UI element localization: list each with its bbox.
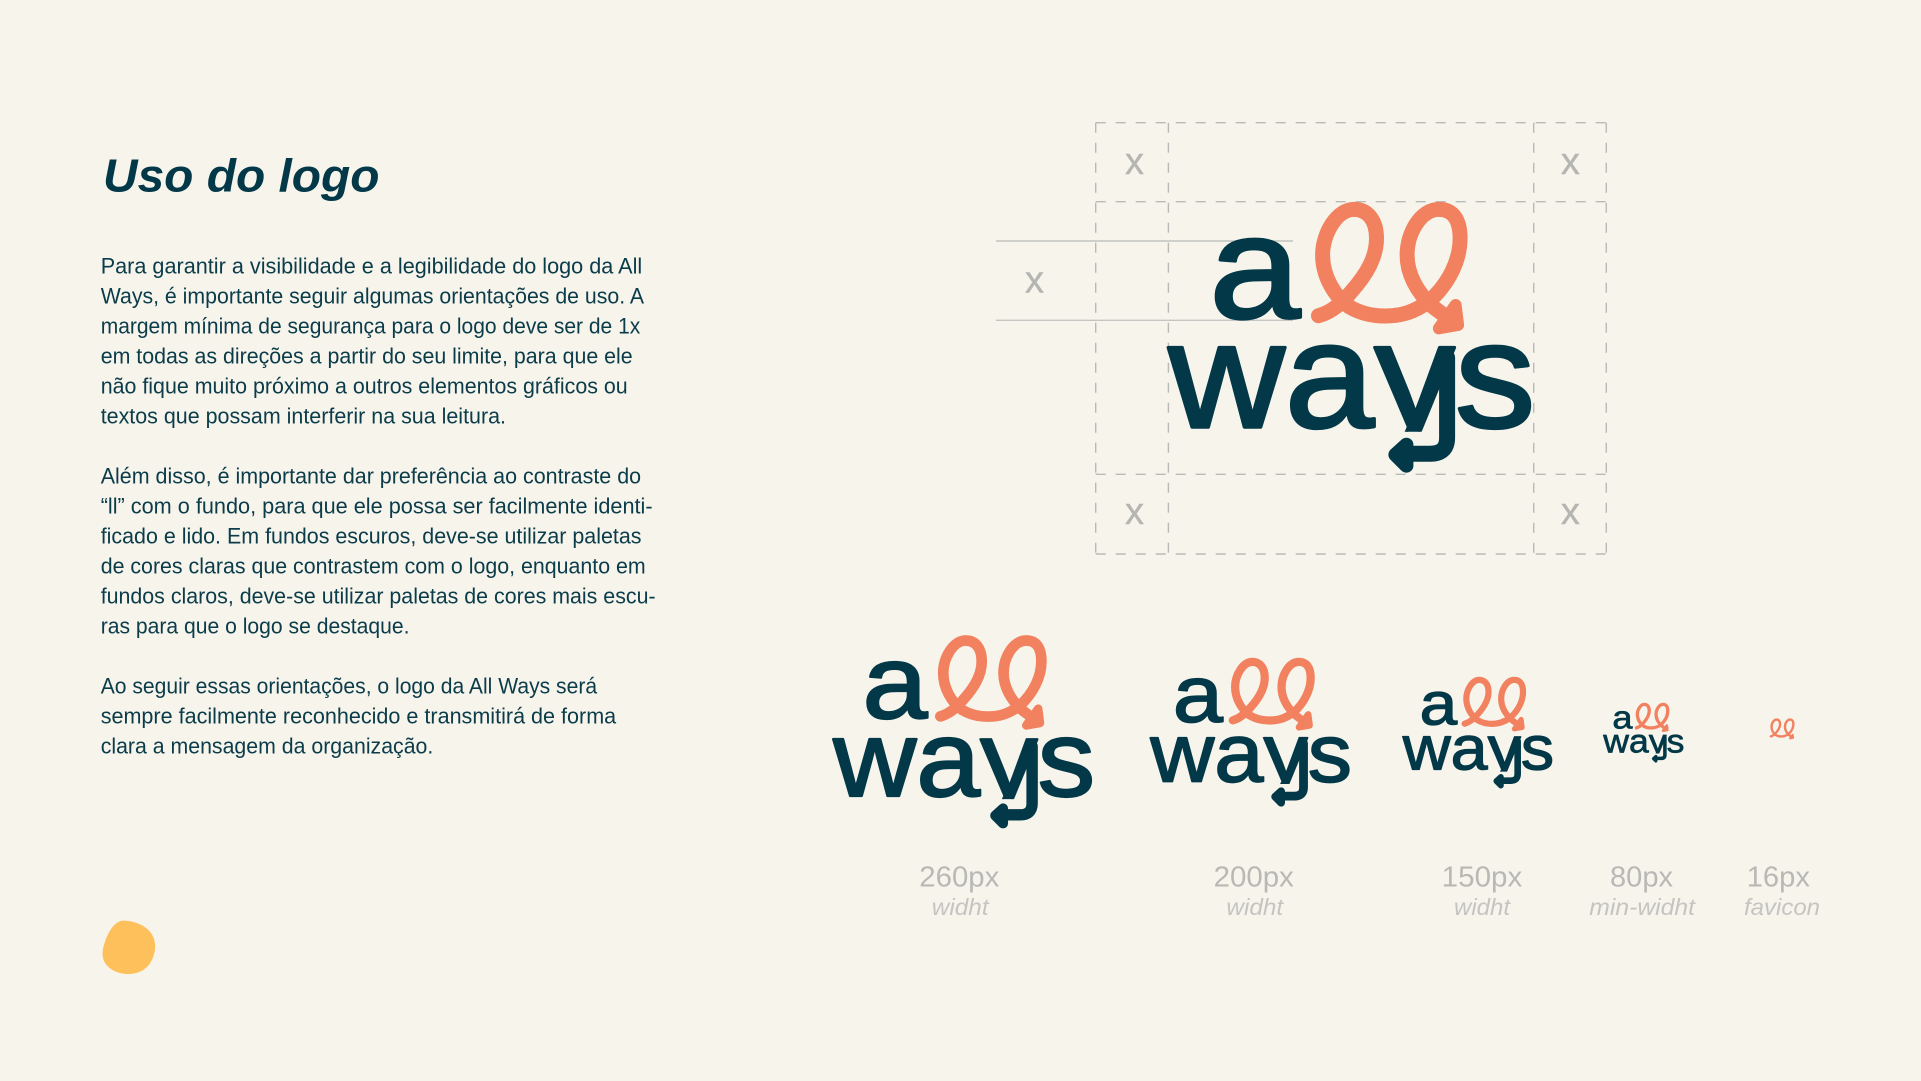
text block: paragraph 3: Ao seguir essas orientações, o logo da All Ways será [101, 674, 598, 698]
text block: paragraph 2 [101, 464, 656, 638]
decorative yellow blob [103, 921, 155, 974]
text block: paragraph 2: ras para que o logo se destaque. [101, 614, 409, 638]
size label: 16px favicon: favicon [1744, 894, 1820, 920]
main logo [1167, 186, 1535, 466]
main logo: ways [1167, 290, 1535, 459]
text block: paragraph 1 [101, 254, 644, 428]
size label: 200px width: widht [1226, 894, 1285, 920]
logo at 260px width [832, 625, 1095, 823]
text block: paragraph 3: clara a mensagem da organização. [101, 734, 433, 758]
text block: paragraph 1: não fique muito próximo a outros elementos gráficos ou [101, 374, 628, 398]
logo at 260px width: ways [832, 698, 1095, 819]
text block: paragraph 2: “ll” com o fundo, para que ele possa ser facilmente identi- [101, 494, 653, 518]
size label: 150px width: 150px [1442, 862, 1523, 894]
size label: 260px width: 260px [919, 862, 1000, 894]
text block: paragraph 2: de cores claras que contrastem com o logo, enquanto em [101, 554, 646, 578]
x-height reference lines [996, 241, 1293, 320]
logo at 80px min-width: ways [1602, 724, 1684, 761]
clear-space x markers: x [1125, 491, 1144, 533]
title: Uso do logo [103, 150, 380, 202]
logo at 200px width: ways [1149, 707, 1352, 800]
text block: paragraph 1: textos que possam interferir na sua leitura. [101, 404, 506, 428]
logo at 200px width: a [1173, 648, 1223, 738]
logo at 150px width [1402, 670, 1554, 786]
text block: paragraph 2: Além disso, é importante dar preferência ao contraste do [101, 464, 641, 488]
size label: 200px width [1214, 862, 1294, 920]
text block: paragraph 2: fundos claros, deve-se utilizar paletas de cores mais escu- [101, 584, 656, 608]
text block: paragraph 1: Ways, é importante seguir algumas orientações de uso. A [101, 284, 644, 308]
size label: 80px min-width: 80px [1610, 862, 1673, 894]
size label: 260px width [919, 862, 1000, 920]
clear-space x markers: x [1561, 491, 1580, 533]
text block: paragraph 1: em todas as direções a partir do seu limite, para que ele [101, 344, 633, 368]
text block: paragraph 1: margem mínima de segurança para o logo deve ser de 1x [101, 314, 641, 338]
size label: 80px min-width [1589, 862, 1697, 920]
text block: paragraph 2: ficado e lido. Em fundos escuros, deve-se utilizar paletas [101, 524, 641, 548]
logo at 200px width [1149, 648, 1352, 803]
text block: paragraph 3: sempre facilmente reconhecido e transmitirá de forma [101, 704, 617, 728]
logo at 150px width: ways [1402, 715, 1554, 784]
clear-space x markers [1025, 141, 1580, 533]
text block: paragraph 3 [101, 674, 617, 758]
size label: 260px width: widht [932, 894, 990, 920]
favicon loop mark at 16px [1771, 720, 1793, 738]
clear-space x markers: x [1025, 260, 1044, 302]
size label: 200px width: 200px [1214, 862, 1294, 894]
clear-space x markers: x [1125, 141, 1144, 183]
text block: paragraph 1: Para garantir a visibilidade e a legibilidade do logo da All [101, 254, 642, 278]
clear-space x markers: x [1561, 141, 1580, 183]
size label: 16px favicon [1744, 862, 1820, 920]
size label: 150px width: widht [1454, 894, 1512, 920]
logo at 80px min-width: a [1612, 699, 1633, 735]
logo at 260px width: a [862, 625, 927, 741]
logo at 80px min-width [1602, 699, 1684, 761]
size label: 16px favicon: 16px [1747, 862, 1810, 894]
size label: 80px min-width: min-widht [1589, 894, 1697, 920]
clear-space grid: dashed guides [1096, 123, 1606, 554]
size label: 150px width [1442, 862, 1523, 920]
logo at 150px width: a [1420, 670, 1458, 738]
main logo: a [1209, 186, 1301, 349]
